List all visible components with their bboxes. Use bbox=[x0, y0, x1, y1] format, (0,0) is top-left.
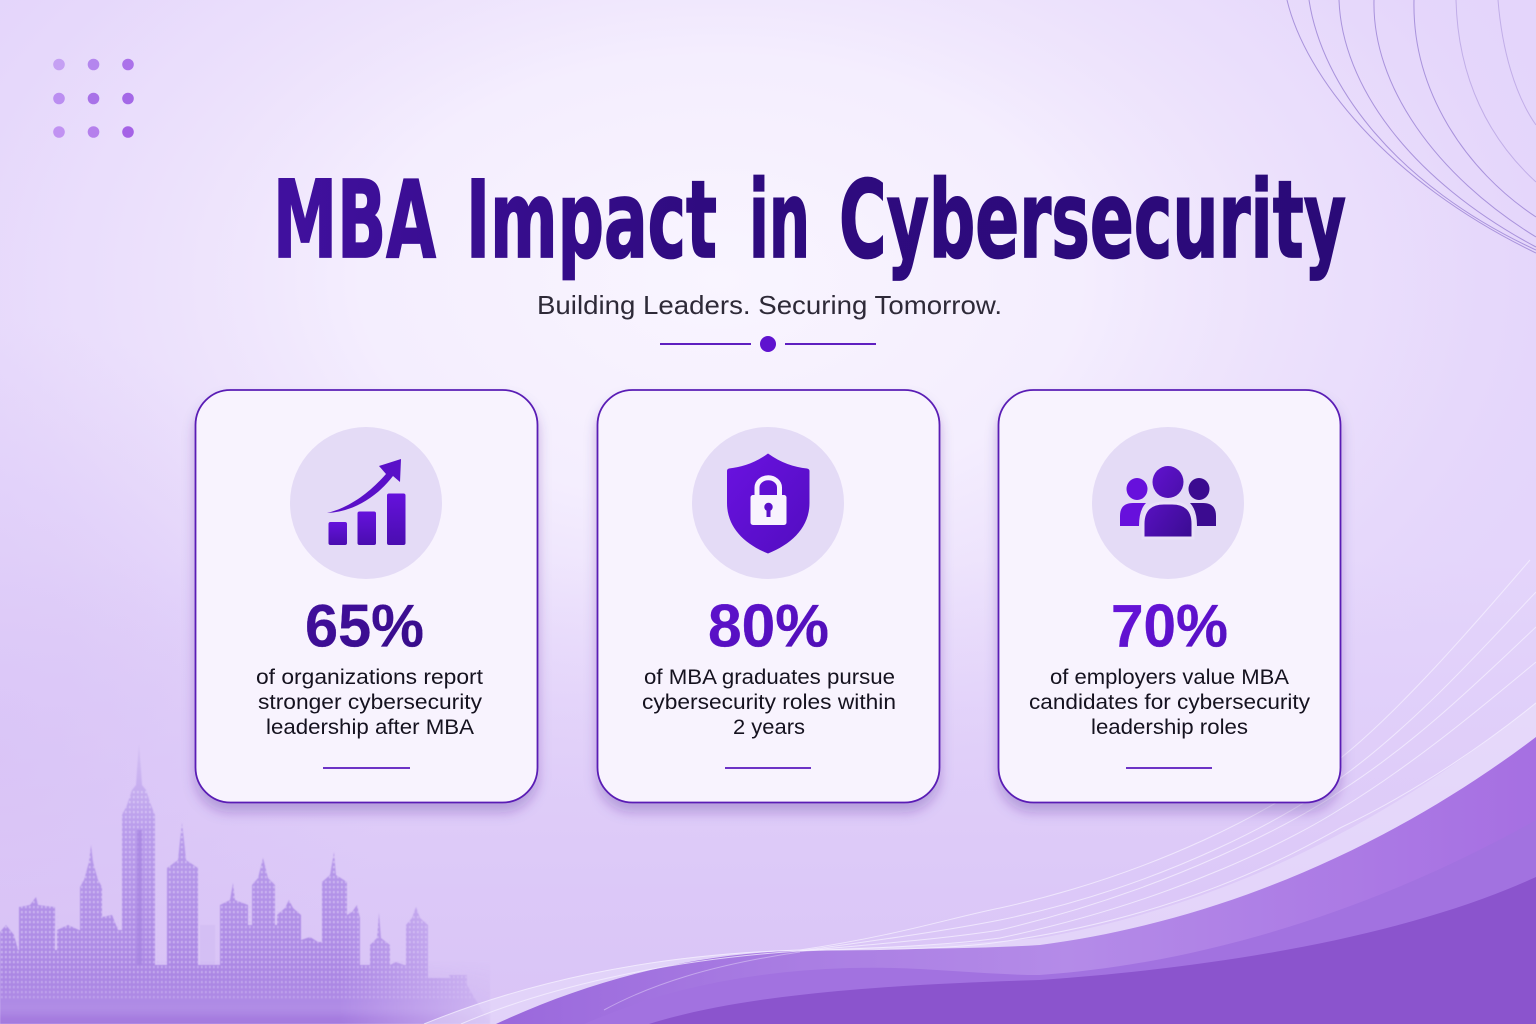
white ribbon bbox=[424, 702, 1536, 1024]
description: card 1: stronger cybersecurity bbox=[258, 690, 482, 714]
stat: 80%: 80% bbox=[708, 592, 829, 660]
icon: growth chart bbox=[290, 427, 442, 579]
title divider bbox=[660, 336, 876, 352]
decorative dot grid bbox=[53, 59, 134, 138]
city skyline bbox=[0, 740, 500, 1024]
description: card 3: candidates for cybersecurity bbox=[1029, 690, 1310, 714]
description: card 3: of employers value MBA bbox=[1050, 665, 1290, 689]
subtitle: Building Leaders. Securing Tomorrow. bbox=[537, 290, 1002, 320]
stat: 65%: 65% bbox=[305, 592, 424, 660]
description: card 3 bbox=[1029, 665, 1310, 739]
panel: card 2 bbox=[598, 390, 940, 802]
title bbox=[273, 159, 1346, 283]
bottom-right wave bbox=[424, 560, 1536, 1024]
description: card 2: 2 years bbox=[733, 715, 805, 739]
icon: shield with padlock bbox=[692, 427, 844, 579]
description: card 3: leadership roles bbox=[1091, 715, 1248, 739]
title: in bbox=[749, 159, 810, 283]
wave highlight lines bbox=[424, 560, 1536, 1024]
description: card 1 bbox=[256, 665, 483, 739]
icon: group of people bbox=[1092, 427, 1244, 579]
panel: card 1 bbox=[196, 390, 538, 802]
description: card 2: of MBA graduates pursue bbox=[644, 665, 895, 689]
title: MBA bbox=[273, 159, 436, 283]
title: Impact bbox=[466, 159, 717, 283]
description: card 2 bbox=[642, 665, 896, 739]
panel: card 3 bbox=[998, 390, 1340, 802]
stat: 70%: 70% bbox=[1111, 592, 1228, 660]
description: card 2: cybersecurity roles within bbox=[642, 690, 896, 714]
description: card 1: of organizations report bbox=[256, 665, 483, 689]
description: card 1: leadership after MBA bbox=[266, 715, 475, 739]
top-right contour arcs bbox=[1287, 0, 1536, 253]
